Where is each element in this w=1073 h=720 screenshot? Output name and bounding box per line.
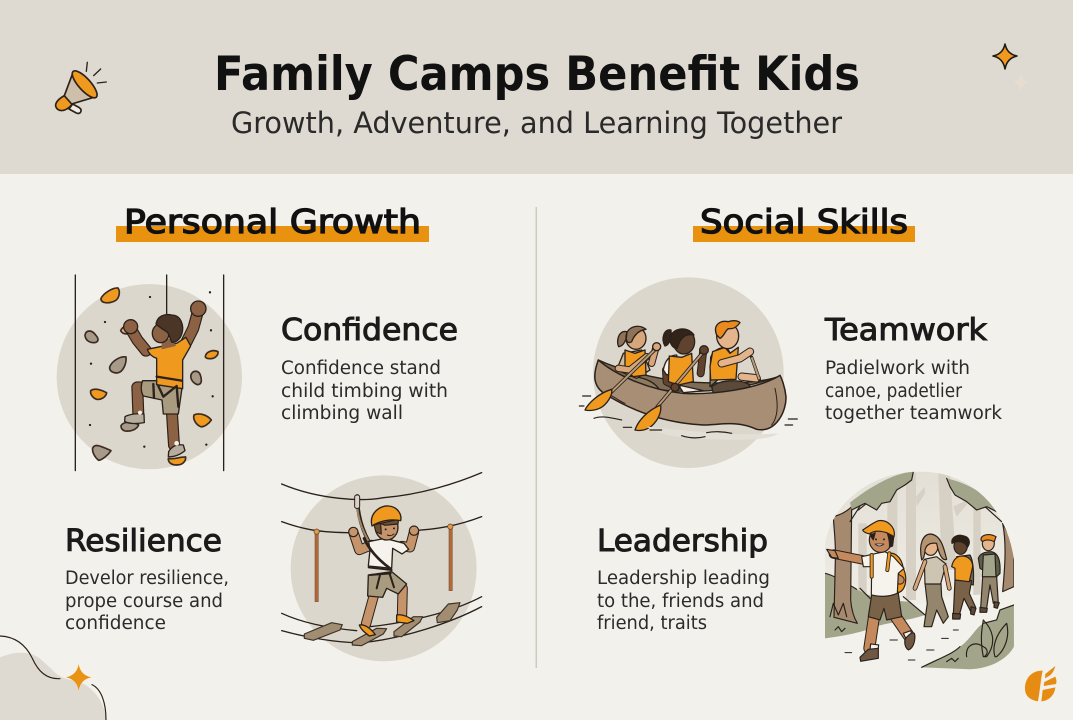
item: resilience: Develor resilience, <box>65 568 229 589</box>
paddles <box>585 343 708 430</box>
heading: social skills: Social Skills <box>700 202 908 241</box>
climbing holds <box>85 288 218 465</box>
trail <box>973 594 981 600</box>
group of hikers <box>827 521 1000 661</box>
leading hiker <box>827 521 915 661</box>
icon: megaphone <box>56 62 106 113</box>
item: leadership <box>597 524 770 634</box>
item: leadership: Leadership leading <box>597 568 770 589</box>
item: leadership: friend, traits <box>597 613 707 634</box>
rope posts <box>314 524 453 602</box>
hiker boy at back <box>978 535 1000 612</box>
illustration: child on climbing wall <box>57 275 242 471</box>
illustration: child on rope course <box>282 473 482 661</box>
divider <box>536 207 537 668</box>
wall studs <box>89 291 214 448</box>
item: resilience: Resilience <box>65 524 222 559</box>
item: teamwork: Padielwork with <box>825 358 970 379</box>
canoe interior <box>598 360 780 391</box>
title: Family Camps Benefit Kids <box>214 47 860 102</box>
illustration: child leading hike in forest <box>823 470 1017 673</box>
item: teamwork <box>824 313 1002 424</box>
second child in canoe <box>663 329 703 393</box>
icon: sparkles top right <box>993 44 1029 92</box>
item: resilience: prope course and <box>65 591 223 612</box>
item: resilience: confidence <box>65 613 166 634</box>
right foreground bush <box>922 605 1014 669</box>
item: confidence: Confidence <box>281 313 458 348</box>
girl in canoe <box>617 326 660 391</box>
icon: logo leaf <box>1025 666 1056 701</box>
item: confidence: child timbing with <box>281 381 448 402</box>
item: leadership: Leadership <box>597 524 768 559</box>
panel: personal growth <box>57 202 482 661</box>
header band <box>0 0 1073 174</box>
climber <box>124 301 206 457</box>
boy in canoe <box>710 321 759 393</box>
panel: social skills <box>579 202 1017 673</box>
item: leadership: to the, friends and <box>597 591 764 612</box>
item: confidence: climbing wall <box>281 403 403 424</box>
icon: corner blob with sparkle <box>0 636 106 720</box>
water <box>647 427 778 440</box>
item: teamwork: canoe, padetlier <box>825 381 962 402</box>
ferns <box>830 603 1008 662</box>
rope walker <box>349 506 419 636</box>
lanyard <box>357 496 390 568</box>
item: teamwork: together teamwork <box>825 403 1002 424</box>
illustration: children paddling canoe <box>579 277 797 468</box>
hiker second child <box>952 535 976 619</box>
subtitle: Growth, Adventure, and Learning Together <box>231 106 842 140</box>
hiker girl <box>915 534 949 627</box>
canoe hull <box>595 360 786 430</box>
item: confidence: Confidence stand <box>281 358 441 379</box>
distant trees <box>858 473 981 600</box>
item: resilience <box>65 524 229 634</box>
planks <box>304 603 460 646</box>
heading: personal growth: Personal Growth <box>124 202 421 241</box>
foreground foliage left <box>823 573 925 639</box>
item: teamwork: Teamwork <box>824 313 988 348</box>
canopy <box>850 472 913 510</box>
item: confidence <box>281 313 458 424</box>
tree trunks <box>833 507 857 623</box>
